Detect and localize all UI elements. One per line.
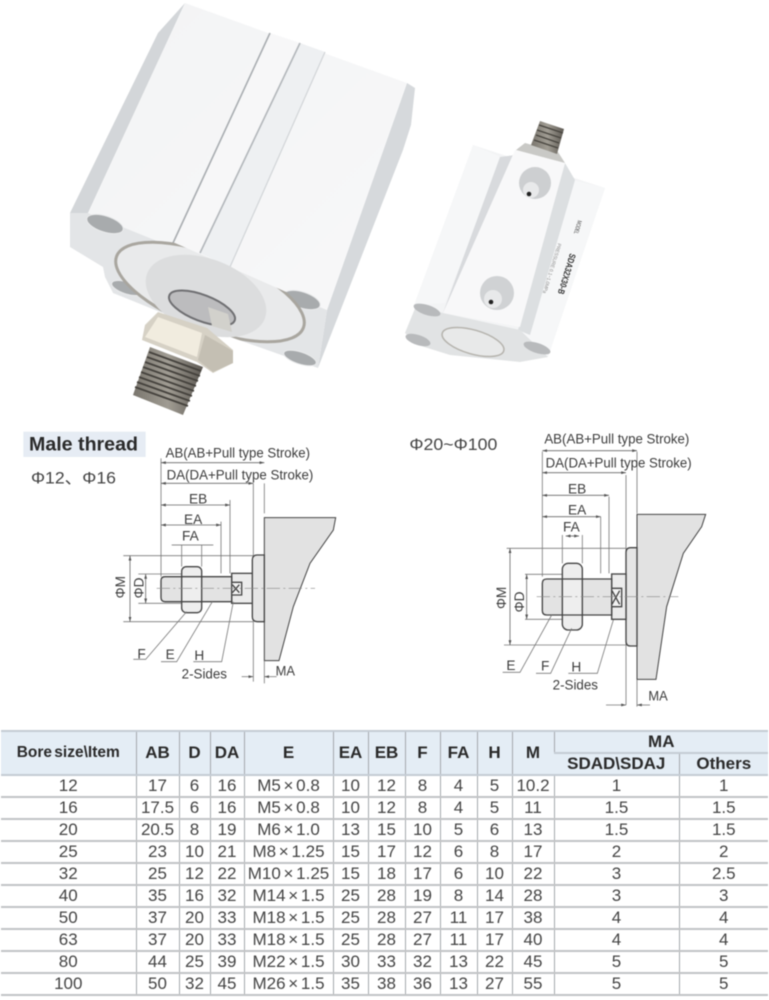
small print: PRESSURE 0.1~1.0MPa	[541, 242, 562, 294]
table rows: 6	[190, 798, 199, 817]
rod flat	[208, 307, 232, 332]
left side strip	[70, 3, 185, 247]
threaded rod	[531, 121, 564, 154]
dimension MA	[242, 664, 296, 679]
table rows: 37	[148, 908, 167, 927]
table rows: 33	[377, 952, 396, 971]
table rows: 6	[190, 776, 199, 795]
table header: Others	[696, 754, 751, 773]
table rows: 12	[377, 798, 396, 817]
dimensions table	[0, 730, 768, 996]
table rows: 10	[341, 776, 360, 795]
table header: E	[283, 743, 294, 762]
table rows: 17	[148, 776, 167, 795]
rod	[165, 283, 239, 333]
table rows: 50	[59, 908, 78, 927]
dimension DA: DA(DA+Pull type Stroke)	[167, 467, 313, 482]
dimension MA	[606, 689, 669, 705]
table rows: 1	[612, 776, 621, 795]
dimension phi D	[512, 574, 527, 619]
dimension FA: FA	[563, 520, 581, 535]
leader E	[503, 615, 552, 673]
table header: M	[526, 743, 540, 762]
table rows: 5	[490, 776, 499, 795]
table rows: 5	[719, 974, 728, 993]
dimension AB: AB(AB+Pull type Stroke)	[166, 445, 310, 460]
table rows: 4	[454, 798, 463, 817]
table header	[1, 731, 768, 775]
table rows: M5 × 0.8	[257, 776, 320, 795]
table rows: 32	[218, 886, 236, 905]
table rows: 37	[148, 930, 167, 949]
table rows: 22	[218, 864, 236, 883]
table rows: 5	[454, 820, 463, 839]
dimension EA: EA	[568, 502, 587, 517]
rod	[612, 574, 626, 619]
table header: SDAD\SDAJ	[567, 754, 665, 773]
leader F: F	[541, 659, 549, 674]
table rows: 1	[719, 776, 728, 795]
extension lines	[123, 458, 264, 683]
table rows: 11	[450, 930, 467, 949]
table rows: 16	[59, 798, 78, 817]
table rows: 22	[485, 952, 504, 971]
dimension phi M: ΦM	[113, 576, 128, 598]
table rows: 10	[185, 842, 204, 861]
table rows: 27	[413, 908, 432, 927]
table rows: 44	[148, 952, 167, 971]
heading: male thread: Male thread	[29, 435, 138, 456]
table rows: 16	[218, 776, 236, 795]
table header: DA	[215, 743, 239, 762]
upper port	[519, 167, 551, 199]
table rows: 27	[413, 930, 432, 949]
dimension FA	[172, 529, 213, 545]
table rows: 17	[485, 908, 504, 927]
dimension DA: DA(DA+Pull type Stroke)	[546, 456, 692, 471]
leader E: E	[166, 647, 175, 662]
table rows: 16	[185, 886, 204, 905]
table rows: 13	[524, 820, 542, 839]
table rows: 36	[413, 974, 432, 993]
table rows: 4	[612, 930, 621, 949]
table rows: 5	[490, 798, 499, 817]
table rows: M22 × 1.5	[252, 952, 325, 971]
table header: EB	[375, 743, 398, 762]
table rows: 19	[413, 886, 432, 905]
rod hex	[516, 143, 565, 163]
table rows: 20.5	[141, 820, 174, 839]
table rows: 19	[218, 820, 236, 839]
table rows: 15	[377, 820, 396, 839]
table rows: 8	[418, 798, 427, 817]
table rows: 39	[218, 952, 236, 971]
table rows: 8	[190, 820, 199, 839]
table rows: 3	[612, 886, 621, 905]
table rows: 21	[218, 842, 236, 861]
table rows: M6 × 1.0	[257, 820, 320, 839]
table rows: 33	[218, 930, 236, 949]
dimension EB: EB	[189, 491, 207, 506]
table header: FA	[448, 743, 469, 762]
front end plate	[70, 213, 327, 368]
bore	[114, 240, 306, 344]
wrench flat	[230, 582, 242, 595]
grooves	[173, 33, 325, 267]
table rows: 4	[719, 908, 728, 927]
dimension MA: MA	[276, 664, 296, 679]
dimension EB	[161, 491, 230, 506]
table rows: 15	[341, 864, 360, 883]
left wing	[414, 145, 503, 305]
table rows: 50	[148, 974, 167, 993]
table rows: 17	[377, 842, 396, 861]
table rows: 14	[485, 886, 504, 905]
table rows: 100	[54, 974, 82, 993]
nut	[142, 312, 233, 373]
table rows: 6	[454, 864, 463, 883]
table rows: 17	[524, 842, 542, 861]
table rows: 11	[450, 908, 467, 927]
mounting holes	[84, 211, 323, 369]
table rows: 32	[413, 952, 432, 971]
table header: Bore size\Item	[17, 744, 120, 761]
table rows: 63	[59, 930, 78, 949]
model label text: SDA32X30-B	[556, 252, 578, 296]
flange	[252, 555, 264, 622]
photo: large cylinder	[70, 3, 415, 415]
table rows: 12	[377, 776, 396, 795]
table header: D	[188, 743, 201, 762]
table rows: 27	[485, 974, 504, 993]
table rows: 28	[377, 886, 396, 905]
label 2-sides: 2-Sides	[553, 677, 598, 692]
leader F	[536, 628, 572, 674]
table rows: 10	[485, 864, 504, 883]
table rows: M8 × 1.25	[252, 842, 325, 861]
dimension EA	[161, 512, 221, 527]
table rows: 16	[218, 798, 236, 817]
table rows: 22	[524, 864, 542, 883]
leader H	[193, 602, 233, 663]
centre line	[537, 596, 678, 598]
table rows: 4	[719, 930, 728, 949]
dimension phi D: ΦD	[512, 591, 527, 612]
piston boss	[439, 322, 507, 362]
table rows: 1.5	[605, 820, 628, 839]
cylinder body	[264, 518, 336, 661]
right side strip	[318, 83, 415, 368]
centre line	[157, 587, 315, 589]
rod	[232, 573, 252, 603]
central raised face	[443, 150, 565, 327]
bore size label: Φ12、Φ16	[31, 468, 116, 487]
table rows: 17	[413, 864, 432, 883]
extension lines	[504, 452, 637, 707]
table rows: M18 × 1.5	[252, 930, 325, 949]
top face	[88, 3, 407, 310]
table rows: 25	[341, 930, 360, 949]
lower port	[480, 276, 514, 310]
table rows: 5	[612, 974, 621, 993]
table rows: 28	[524, 886, 542, 905]
table rows: 23	[148, 842, 167, 861]
table rows: 25	[341, 908, 360, 927]
photo: small cylinder	[404, 121, 605, 362]
table rows: 2.5	[712, 864, 736, 883]
dimension EB	[542, 481, 609, 496]
table rows: 8	[454, 886, 463, 905]
label 2-sides: 2-Sides	[182, 666, 227, 681]
table rows: 5	[612, 952, 621, 971]
table rows: M10 × 1.25	[248, 864, 329, 883]
dimension FA: FA	[182, 529, 200, 544]
leader F: F	[137, 646, 146, 661]
bore size label: Φ20~Φ100	[409, 435, 497, 454]
table header: AB	[145, 743, 170, 762]
thread	[133, 347, 203, 415]
table rows: 11	[524, 798, 542, 817]
table rows: 1.5	[605, 798, 628, 817]
wrench flat	[610, 588, 622, 607]
table rows: 12	[413, 842, 432, 861]
table rows: 6	[454, 842, 463, 861]
dimension EB: EB	[568, 481, 586, 496]
table rows: 2	[719, 842, 728, 861]
table rows: 40	[59, 886, 78, 905]
table rows: 2	[612, 842, 621, 861]
table header: MA	[648, 732, 674, 751]
dimension phi M	[494, 548, 510, 645]
dimension AB: AB(AB+Pull type Stroke)	[544, 431, 689, 446]
table rows: 15	[341, 842, 360, 861]
table rows: M14 × 1.5	[252, 886, 325, 905]
leader H: H	[571, 660, 581, 675]
end plate	[405, 306, 548, 362]
table rows: 25	[59, 842, 78, 861]
table rows: 55	[524, 974, 542, 993]
left channel	[443, 155, 515, 313]
end holes	[404, 301, 552, 357]
table rows: 10	[341, 798, 360, 817]
table rows: 1.5	[712, 820, 736, 839]
table rows: 17	[485, 930, 504, 949]
table rows: M18 × 1.5	[252, 908, 325, 927]
table rows	[54, 776, 736, 993]
table rows: 25	[185, 952, 204, 971]
table rows: 80	[59, 952, 78, 971]
table rows: 25	[148, 864, 167, 883]
leader H: H	[194, 648, 204, 663]
table rows: 6	[490, 820, 499, 839]
leader E	[161, 602, 212, 662]
nut	[562, 563, 582, 630]
table rows: 30	[341, 952, 360, 971]
table rows: 17.5	[141, 798, 174, 817]
table rows: 10	[413, 820, 432, 839]
table rows: 13	[341, 820, 360, 839]
diagram: male thread, bore 12 and 16	[23, 432, 336, 683]
dimension phi M	[113, 556, 130, 622]
table rows: 40	[524, 930, 542, 949]
table rows: 45	[524, 952, 542, 971]
table header: F	[417, 743, 428, 762]
table rows: 45	[218, 974, 236, 993]
table rows: 18	[377, 864, 396, 883]
table rows: 3	[612, 864, 621, 883]
table header: EA	[339, 743, 362, 762]
model caption: MODEL	[572, 219, 582, 235]
dimension phi M: ΦM	[494, 587, 509, 609]
table rows: 1.5	[712, 798, 736, 817]
dimension MA: MA	[648, 689, 669, 704]
flange	[626, 548, 637, 646]
table rows: 3	[719, 886, 728, 905]
body outline	[405, 145, 605, 357]
table rows: M5 × 0.8	[257, 798, 320, 817]
table rows: 20	[59, 820, 78, 839]
table rows: 38	[377, 974, 396, 993]
table rows: 25	[341, 886, 360, 905]
table rows: 5	[719, 952, 728, 971]
boss plate	[134, 239, 278, 353]
table rows: M26 × 1.5	[252, 974, 325, 993]
table rows: 8	[418, 776, 427, 795]
table rows: 13	[449, 952, 468, 971]
dimension EA	[542, 502, 601, 517]
nut	[182, 567, 202, 613]
table rows: 4	[612, 908, 621, 927]
table header: H	[488, 743, 501, 762]
leader E: E	[506, 658, 515, 673]
table rows: 28	[377, 930, 396, 949]
table rows: 35	[341, 974, 360, 993]
table rows: 38	[524, 908, 542, 927]
table rows: 20	[185, 908, 204, 927]
table rows: 35	[148, 886, 167, 905]
leader H	[568, 620, 613, 675]
thread	[161, 577, 232, 602]
table rows: 13	[449, 974, 468, 993]
table rows: 12	[59, 776, 78, 795]
leader F	[133, 612, 187, 661]
thread	[542, 579, 612, 615]
right channel	[518, 163, 575, 335]
table rows: 32	[59, 864, 78, 883]
cylinder body	[637, 514, 706, 679]
table rows: 28	[377, 908, 396, 927]
table rows: 4	[454, 776, 463, 795]
table rows: 8	[490, 842, 499, 861]
table rows: 12	[185, 864, 204, 883]
table rows: 33	[218, 908, 236, 927]
table rows: 10.2	[516, 776, 550, 795]
dimension EA: EA	[184, 512, 203, 527]
table rows: 32	[185, 974, 204, 993]
right wing	[520, 180, 605, 357]
diagram: bore 20 to 100	[409, 431, 706, 707]
dimension phi D: ΦD	[131, 577, 146, 598]
table rows: 20	[185, 930, 204, 949]
